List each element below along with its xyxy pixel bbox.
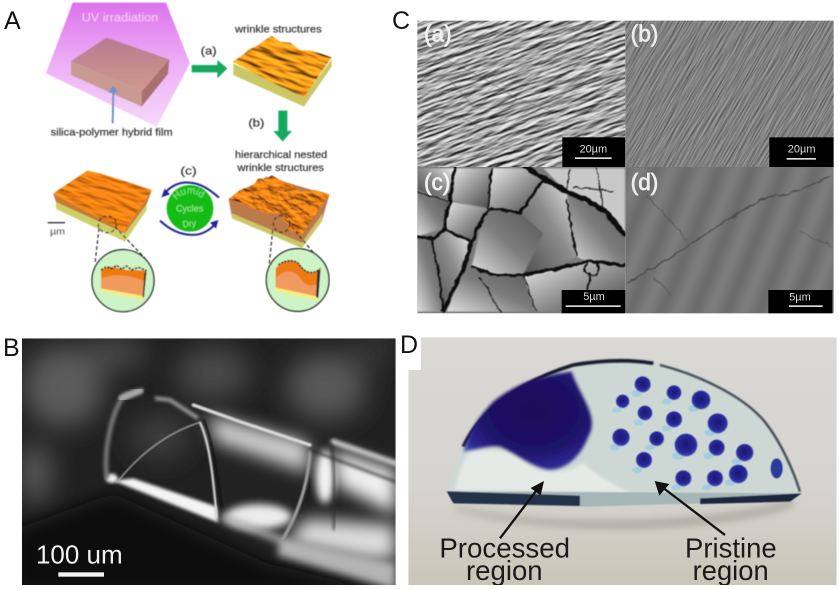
scale box 5 µm (c): 5µm — [583, 291, 605, 303]
dashed zoom guide right — [269, 216, 317, 263]
wrinkled block — [232, 35, 332, 107]
droplets — [610, 376, 783, 490]
green arrow a — [192, 60, 227, 78]
wrinkled block after cycles — [52, 170, 152, 242]
SEM image (b) — [625, 20, 834, 167]
Humid label: Humid — [172, 187, 206, 200]
label (b): (b) — [631, 21, 658, 47]
dashed zoom guide left — [95, 216, 145, 263]
step (b) label: (b) — [248, 118, 264, 130]
glass bottom edge — [447, 491, 802, 507]
micrometre scale bar — [48, 223, 65, 236]
tube glass body — [106, 415, 396, 589]
panel B: microscope photo of tube — [13, 337, 397, 589]
processed dyed region — [463, 372, 592, 470]
region label left: region — [466, 555, 543, 586]
panel label B: B — [3, 334, 20, 362]
SEM image (a) — [417, 20, 626, 167]
blue pointer arrow — [108, 85, 118, 123]
thin right rim — [660, 365, 800, 492]
scale box 5 µm (d): 5µm — [789, 292, 811, 304]
film label: silica-polymer hybrid film — [51, 128, 173, 139]
cast shadow — [457, 500, 793, 528]
UV irradiation label: UV irradiation — [82, 11, 158, 25]
hierarchical block — [203, 146, 357, 270]
panel label D: D — [400, 331, 418, 359]
cycle arrow top — [161, 183, 219, 198]
lighter lower-left area — [455, 450, 633, 493]
arrow to pristine region — [655, 481, 725, 535]
scale box 20 µm (a) — [562, 137, 625, 167]
scale label 100 um: 100 um — [36, 539, 123, 569]
panel D: dyed water droplets on half-disc — [408, 337, 837, 586]
SEM image (d) — [625, 167, 834, 313]
UV irradiation pentagon — [46, 3, 190, 127]
SEM image (c) — [417, 167, 625, 313]
panel C: SEM micrographs — [417, 20, 834, 314]
hierarchical nested label: hierarchical nested — [235, 150, 327, 161]
label (a): (a) — [424, 21, 452, 47]
wrinkle structures second line: wrinkle structures — [236, 163, 324, 174]
magnified inset left — [92, 250, 154, 312]
cycle arrow bottom — [160, 220, 218, 235]
Processed label: Processed — [439, 532, 570, 563]
white tag behind label D — [400, 337, 421, 370]
label (c): (c) — [424, 169, 450, 195]
panel label A: A — [4, 7, 21, 35]
panel A: wrinkle fabrication schematic — [46, 2, 332, 314]
step (a) label: (a) — [201, 45, 217, 57]
half-disc glass slide — [447, 360, 802, 496]
scale box 5 µm (c) — [562, 290, 625, 313]
label (d): (d) — [631, 169, 658, 195]
dark rim — [463, 361, 653, 447]
step (c) label: (c) — [180, 166, 197, 178]
arrow to processed region — [500, 481, 544, 538]
wrinkle structures label: wrinkle structures — [234, 24, 322, 35]
Pristine label: Pristine — [685, 532, 777, 563]
paper background — [408, 337, 837, 585]
micrometre label: µm — [50, 226, 65, 236]
scale bar — [58, 572, 104, 577]
region label right: region — [693, 555, 769, 586]
tube tip and membrane lines — [106, 390, 396, 538]
scale box 5 µm (d) — [768, 290, 832, 313]
panel label C: C — [392, 7, 410, 35]
scale box 20 µm (b) — [769, 137, 834, 167]
scale box 20 µm (a): 20µm — [579, 143, 607, 155]
dark photo background — [13, 337, 397, 589]
scale box 20 µm (b): 20µm — [788, 143, 816, 155]
Dry label: Dry — [182, 218, 197, 229]
silica-polymer hybrid film block — [71, 38, 169, 107]
green arrow b — [273, 111, 292, 142]
magnified inset right — [266, 249, 329, 311]
Cycles label: Cycles — [176, 204, 204, 214]
humid dry cycle circle — [166, 184, 214, 232]
